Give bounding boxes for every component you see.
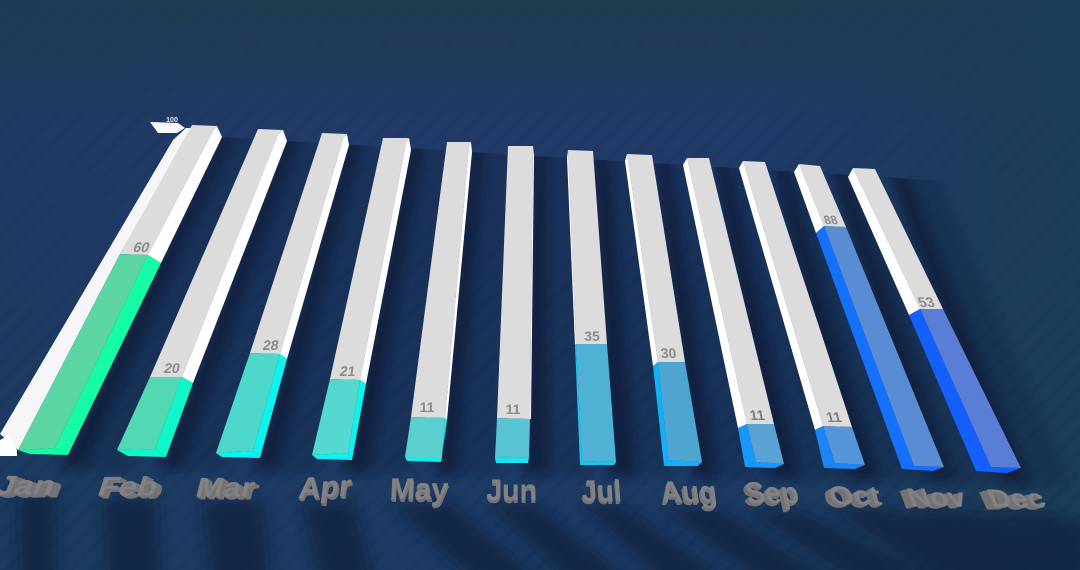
month label: Mar: Mar — [193, 473, 258, 503]
month label: Feb: Feb — [94, 472, 162, 502]
month label: Jun: Jun — [486, 474, 537, 507]
value: 21 — [339, 363, 357, 379]
value: 30 — [660, 345, 677, 361]
month label: Dec: Dec — [983, 485, 1050, 513]
month label: Aug: Aug — [659, 476, 719, 509]
axis top value: 100 — [166, 117, 178, 124]
month label: Apr: Apr — [297, 470, 353, 505]
bar: Sep — [683, 158, 784, 468]
month label: May: May — [389, 473, 449, 506]
value: 35 — [584, 328, 600, 344]
value: 20 — [163, 360, 182, 376]
bar: Oct — [739, 161, 865, 469]
value: 88 — [822, 213, 840, 227]
bar: Feb — [117, 129, 287, 457]
bar: Dec — [848, 168, 1021, 473]
bar: May — [405, 142, 472, 462]
month label: Jul: Jul — [580, 475, 623, 508]
value: 53 — [916, 295, 937, 311]
bar: Apr — [312, 138, 411, 460]
month label: Oct: Oct — [825, 482, 885, 511]
value: 11 — [748, 407, 766, 423]
value: 28 — [262, 337, 280, 353]
value: 11 — [506, 401, 521, 417]
value: 11 — [420, 399, 435, 415]
bar: Jul — [567, 150, 616, 465]
bar: Aug — [625, 154, 702, 466]
value: 11 — [825, 410, 843, 426]
month label: Nov: Nov — [903, 484, 970, 512]
bar: Jan — [18, 125, 222, 455]
cast shadows of month labels — [18, 492, 1080, 570]
bar: Nov — [794, 164, 944, 471]
axis top tick — [150, 122, 185, 133]
value: 60 — [131, 240, 152, 256]
month label: Sep: Sep — [743, 477, 802, 510]
bar: Jun — [495, 146, 534, 463]
cast shadows of bars — [60, 130, 1070, 486]
y axis — [0, 117, 192, 456]
bar: Mar — [216, 133, 349, 458]
